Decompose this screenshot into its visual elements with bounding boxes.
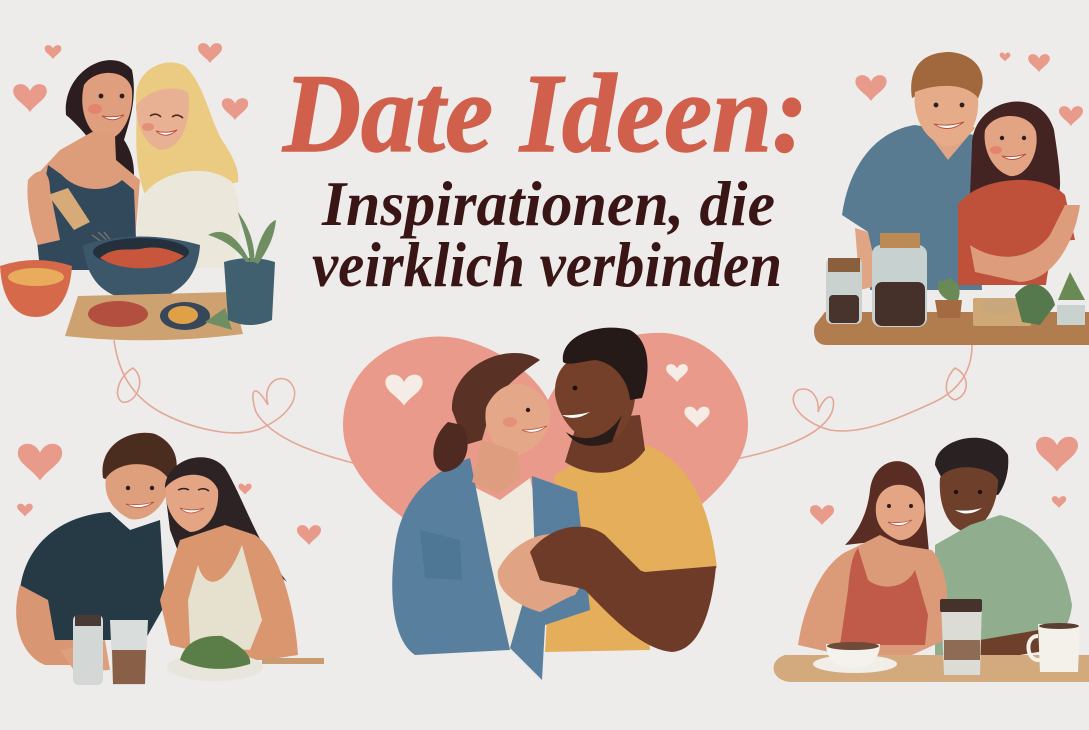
hearts top left: [13, 43, 248, 120]
blue bowl: [83, 236, 200, 300]
dark haired woman: [27, 60, 140, 270]
table: [774, 655, 1089, 682]
woman head: [433, 353, 550, 494]
denim jacket left: [392, 458, 510, 655]
man: [935, 438, 1072, 660]
clasped hands: [498, 527, 645, 612]
small plant in pot: [935, 300, 962, 318]
man: [16, 433, 177, 672]
bottle: [73, 615, 103, 685]
small jar: [826, 258, 862, 324]
woman: [798, 461, 947, 665]
big jar: [872, 245, 927, 327]
woman: [160, 457, 298, 660]
connecting heart lines: [114, 340, 972, 467]
whisk and rolling pin: [48, 188, 90, 230]
woman white shirt: [470, 478, 548, 652]
glass of coffee: [110, 620, 148, 685]
scene: couple with drinks bottom left: [16, 433, 324, 685]
coffee saucer and cup: [813, 655, 897, 673]
subtitle: veirklich verbinden: [312, 229, 782, 300]
white mug: [1038, 624, 1080, 672]
man arm: [585, 555, 716, 652]
large heart: [343, 333, 748, 600]
denim jacket right: [510, 476, 590, 680]
potted plant: [224, 258, 275, 325]
woman: [958, 102, 1080, 285]
central couple with heart: [343, 328, 748, 680]
scene: couple at cafe bottom right: [774, 438, 1089, 682]
orange bowl: [0, 260, 72, 317]
scene: cooking couple top left: [0, 60, 276, 340]
man: [842, 52, 983, 290]
hearts top right: [855, 53, 1083, 126]
travel mug: [941, 602, 982, 675]
table: [814, 312, 1089, 345]
white hearts: [385, 364, 710, 428]
tray and herbs: [973, 298, 1031, 326]
subtitle: [312, 168, 782, 300]
cutting board: [65, 292, 243, 340]
title: Date Ideen:: [282, 52, 808, 176]
hearts bottom right: [810, 437, 1078, 525]
blonde woman: [136, 62, 240, 268]
scene: couple with jars top right: [814, 52, 1089, 345]
salad plate: [167, 653, 263, 681]
hearts bottom left: [17, 444, 321, 545]
subtitle: Inspirationen, die: [321, 168, 775, 239]
man yellow shirt: [545, 443, 717, 652]
man neck and head: [555, 328, 648, 473]
